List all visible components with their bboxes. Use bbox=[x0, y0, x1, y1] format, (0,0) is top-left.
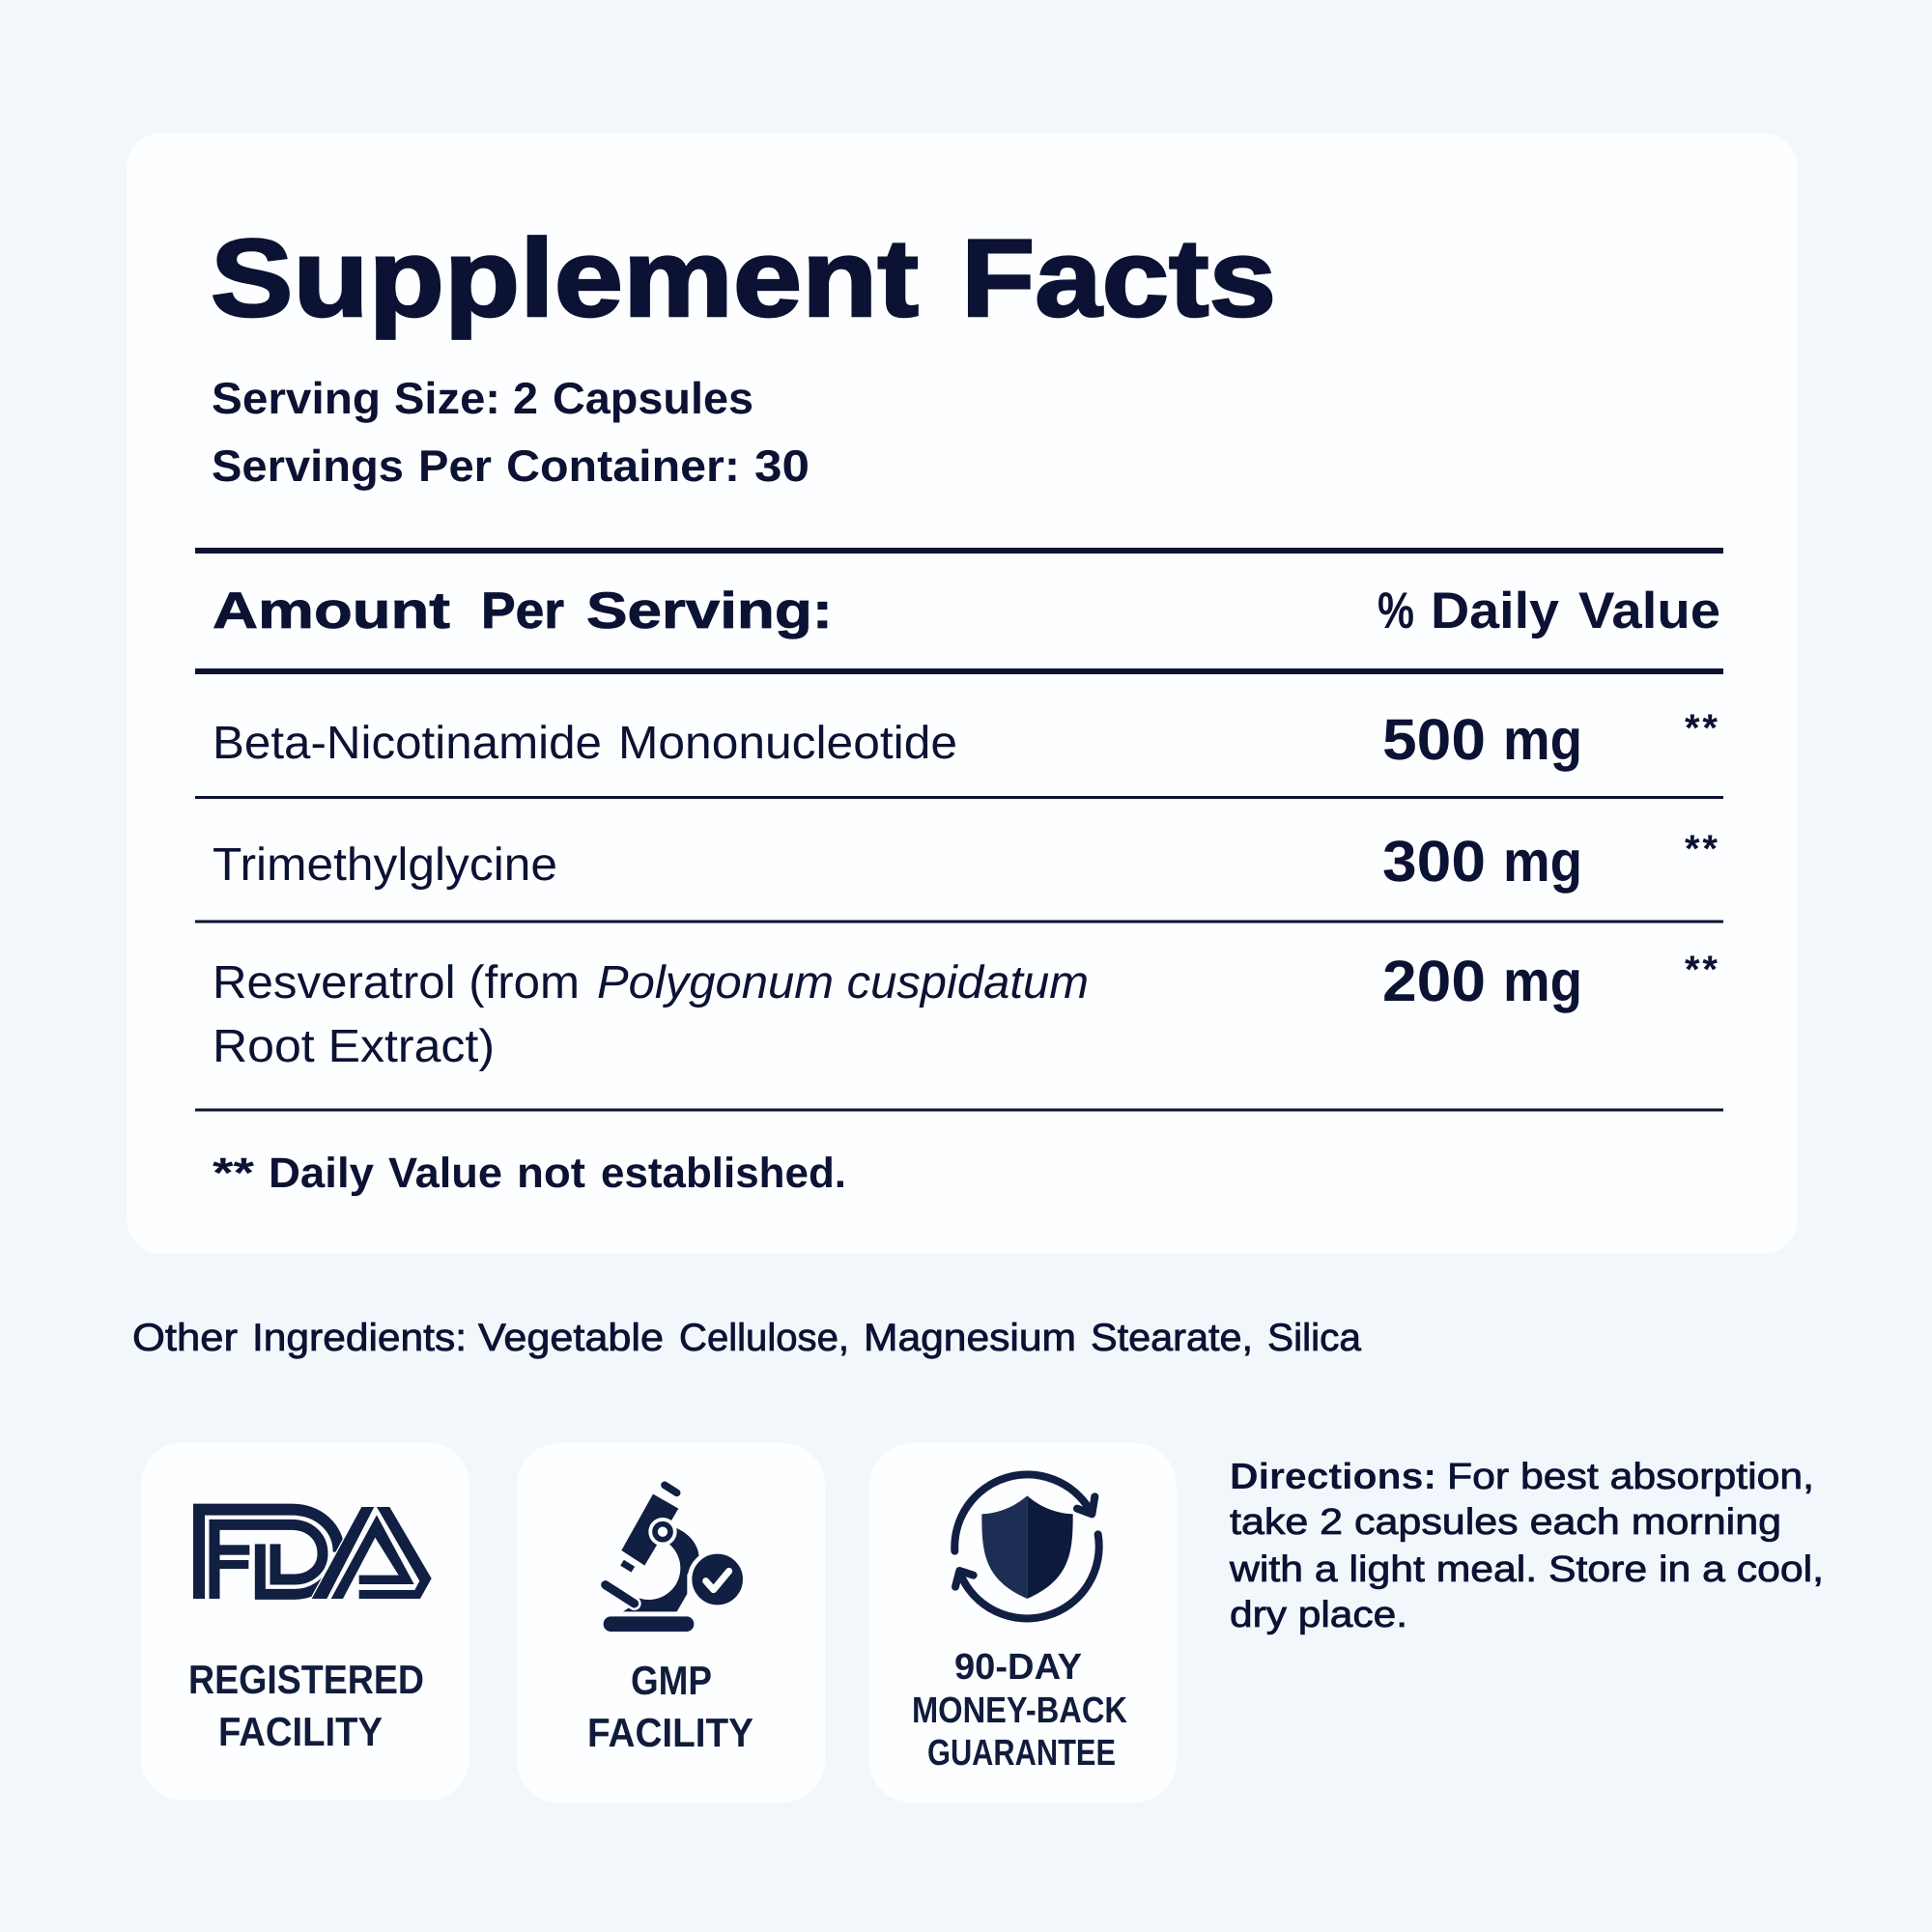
table header: % bbox=[1378, 582, 1414, 639]
title: Facts bbox=[961, 217, 1276, 340]
serving information: Servings bbox=[212, 440, 404, 491]
row: resveratrol bbox=[213, 949, 1718, 1072]
table header: Value bbox=[1578, 582, 1720, 639]
icon: microscope with check bbox=[604, 1485, 745, 1632]
directions: For best absorption, bbox=[1447, 1457, 1814, 1497]
other ingredients bbox=[132, 1317, 1362, 1359]
table header bbox=[213, 582, 1720, 639]
serving information: Size: bbox=[394, 373, 500, 423]
other ingredients: Vegetable bbox=[478, 1317, 664, 1359]
panel: supplement facts bbox=[127, 133, 1798, 1254]
footnote: Value bbox=[388, 1150, 502, 1197]
label: GMP facility: GMP bbox=[631, 1658, 712, 1703]
label: registered facility bbox=[188, 1657, 424, 1754]
directions bbox=[1229, 1457, 1824, 1635]
icon: FDA logo bbox=[199, 1507, 432, 1599]
other ingredients: Ingredients: bbox=[252, 1317, 467, 1359]
directions: take 2 capsules each morning bbox=[1230, 1502, 1781, 1543]
row: trimethylglycine: mg bbox=[1503, 829, 1582, 894]
title bbox=[211, 217, 1276, 340]
row: beta-nicotinamide mononucleotide: ** bbox=[1685, 707, 1718, 750]
table header: Daily bbox=[1431, 582, 1560, 639]
row: beta-nicotinamide mononucleotide: mg bbox=[1503, 707, 1582, 772]
other ingredients: Other bbox=[132, 1317, 238, 1359]
other ingredients: Stearate, bbox=[1091, 1317, 1253, 1359]
row: resveratrol: Resveratrol (from bbox=[213, 957, 580, 1009]
label: 90-day money-back guarantee: MONEY-BACK bbox=[912, 1690, 1127, 1731]
serving information: Capsules bbox=[553, 373, 753, 423]
title: Supplement bbox=[211, 217, 919, 340]
label: 90-day money-back guarantee: GUARANTEE bbox=[927, 1733, 1116, 1774]
row: resveratrol: mg bbox=[1503, 949, 1582, 1013]
footnote: ** bbox=[213, 1150, 255, 1197]
serving information: Serving bbox=[212, 373, 381, 423]
row: trimethylglycine bbox=[213, 828, 1718, 894]
footnote: established. bbox=[601, 1150, 846, 1197]
serving information: Per bbox=[418, 440, 492, 491]
label: GMP facility: FACILITY bbox=[587, 1710, 753, 1755]
badge: GMP facility bbox=[517, 1443, 825, 1803]
row: resveratrol: ** bbox=[1685, 949, 1718, 991]
other ingredients: Cellulose, bbox=[679, 1317, 849, 1359]
row: resveratrol: Polygonum cuspidatum bbox=[597, 957, 1089, 1009]
row: beta-nicotinamide mononucleotide bbox=[213, 707, 1718, 772]
serving information: 30 bbox=[754, 440, 810, 491]
row: beta-nicotinamide mononucleotide: 500 bbox=[1382, 707, 1486, 772]
serving information: 2 bbox=[513, 373, 538, 423]
other ingredients: Silica bbox=[1267, 1317, 1362, 1359]
label: registered facility: REGISTERED bbox=[188, 1657, 424, 1702]
row: resveratrol: Root Extract) bbox=[213, 1021, 495, 1072]
serving information: Container: bbox=[506, 440, 740, 491]
table header: Amount bbox=[213, 582, 450, 639]
footnote bbox=[213, 1150, 846, 1197]
directions: with a light meal. Store in a cool, bbox=[1229, 1549, 1824, 1590]
table header: Per bbox=[481, 582, 564, 639]
label: 90-day money-back guarantee bbox=[912, 1647, 1127, 1774]
directions: dry place. bbox=[1230, 1595, 1407, 1635]
badge: FDA registered facility bbox=[141, 1442, 469, 1801]
other ingredients: Magnesium bbox=[864, 1317, 1076, 1359]
row: trimethylglycine: ** bbox=[1685, 828, 1718, 870]
table header: Serving: bbox=[586, 582, 833, 639]
label: GMP facility bbox=[587, 1658, 753, 1755]
label: 90-day money-back guarantee: 90-DAY bbox=[954, 1647, 1082, 1688]
footnote: Daily bbox=[269, 1150, 375, 1197]
serving information bbox=[212, 373, 810, 491]
icon: shield with circular arrows bbox=[954, 1474, 1099, 1618]
row: trimethylglycine: 300 bbox=[1382, 829, 1486, 894]
row: resveratrol: 200 bbox=[1382, 949, 1486, 1013]
row: trimethylglycine: Trimethylglycine bbox=[213, 839, 557, 891]
row: beta-nicotinamide mononucleotide: Mononucleotide bbox=[618, 718, 957, 769]
badge: money-back guarantee bbox=[869, 1443, 1177, 1803]
label: registered facility: FACILITY bbox=[218, 1709, 383, 1754]
row: beta-nicotinamide mononucleotide: Beta-Nicotinamide bbox=[213, 718, 602, 769]
footnote: not bbox=[517, 1150, 585, 1197]
directions: Directions: bbox=[1230, 1457, 1436, 1497]
